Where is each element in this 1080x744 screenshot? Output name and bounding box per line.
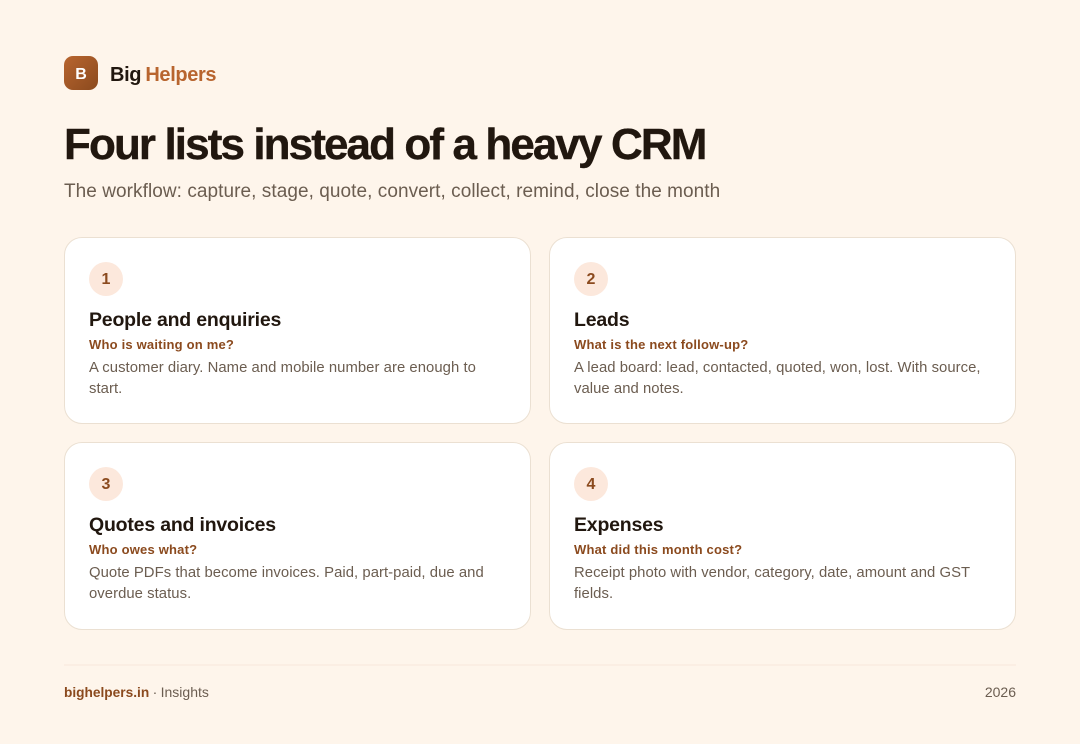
footer source: bighelpers.in · Insights [64, 684, 209, 700]
number badge 1 [89, 262, 123, 296]
card description: value and notes. [574, 381, 684, 397]
card description [89, 565, 484, 602]
title: Four lists instead of a heavy CRM [64, 120, 705, 169]
card question: What is the next follow-up? [574, 337, 748, 352]
card heading: Quotes and invoices [89, 514, 276, 536]
card description: Quote PDFs that become invoices. Paid, part-paid, due and [89, 565, 484, 581]
card description [574, 565, 970, 602]
card heading: People and enquiries [89, 309, 281, 331]
number badge 4: 4 [587, 476, 595, 493]
panel: quotes and invoices [64, 442, 531, 630]
card description: start. [89, 381, 122, 397]
panel: people and enquiries [64, 237, 531, 424]
number badge 2 [574, 262, 608, 296]
icon: B badge: B [75, 66, 87, 83]
card description [574, 360, 981, 397]
number badge 3: 3 [102, 476, 110, 493]
card question: Who is waiting on me? [89, 337, 234, 352]
card description: Receipt photo with vendor, category, date, amount and GST [574, 565, 970, 581]
number badge 1: 1 [102, 271, 110, 288]
number badge 2: 2 [587, 271, 595, 288]
footer year: 2026 [985, 684, 1016, 700]
panel: leads [549, 237, 1016, 424]
card description: fields. [574, 586, 613, 602]
card heading: Leads [574, 309, 629, 331]
brand name: Big Helpers [110, 64, 216, 86]
card description: A customer diary. Name and mobile number are enough to [89, 360, 476, 376]
card question: Who owes what? [89, 542, 197, 557]
number badge 4 [574, 467, 608, 501]
card description [89, 360, 476, 397]
icon: B badge [64, 56, 98, 90]
card description: overdue status. [89, 586, 191, 602]
card description: A lead board: lead, contacted, quoted, won, lost. With source, [574, 360, 981, 376]
card question: What did this month cost? [574, 542, 742, 557]
brand logo [64, 56, 216, 90]
subtitle: The workflow: capture, stage, quote, convert, collect, remind, close the month [64, 181, 720, 202]
card heading: Expenses [574, 514, 663, 536]
number badge 3 [89, 467, 123, 501]
panel: expenses [549, 442, 1016, 630]
